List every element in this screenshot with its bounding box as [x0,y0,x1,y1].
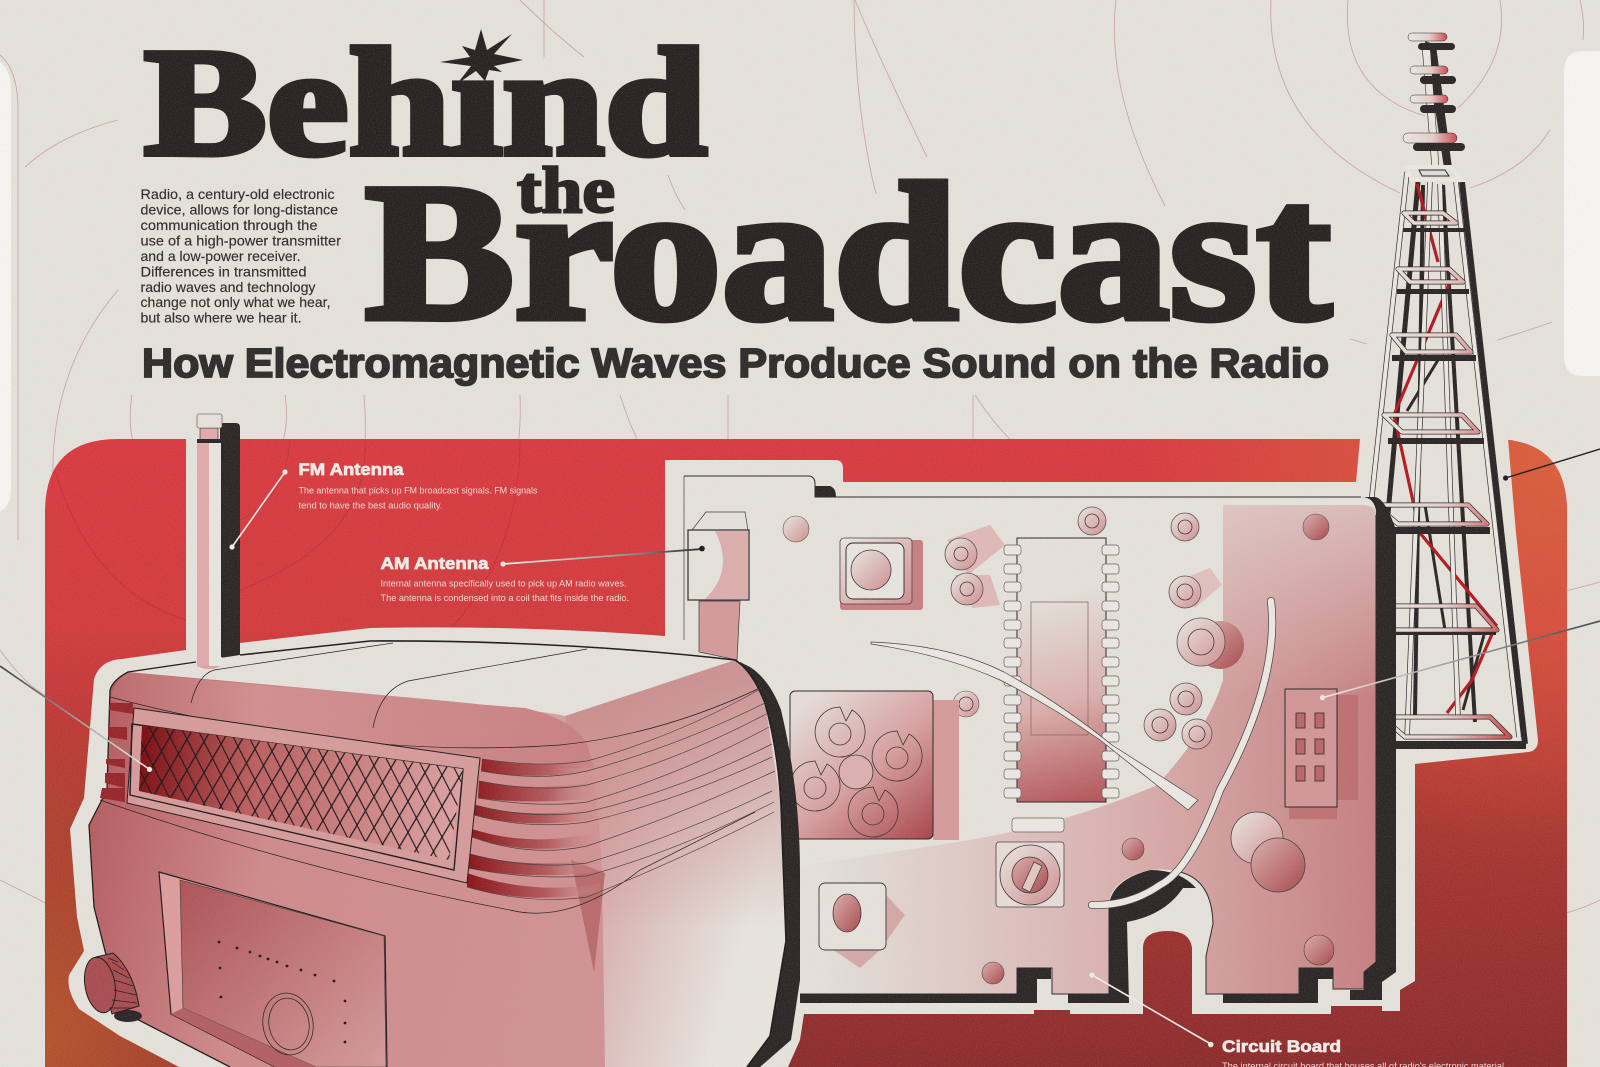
right white side tab [1564,51,1600,376]
tower top frame [1407,167,1462,180]
platforms [1369,213,1526,749]
lattice red braces [1394,184,1496,713]
callout: FM Antenna [229,461,538,550]
rotary potentiometer [996,842,1064,907]
subtitle: How Electromagnetic Waves Produce Sound on the Radio [142,340,1329,386]
circuit board [684,476,1396,1003]
callout: Circuit Board [1089,972,1504,1067]
icon: star over the i [440,29,523,84]
body shadow [700,662,800,1067]
speaker grille [127,708,480,883]
panel speaker dots [218,941,346,1043]
outline and seams [89,641,786,1067]
callout line: tower [1503,449,1600,481]
callout: AM Antenna: AM Antenna [380,555,489,573]
pink lower tone [800,505,1376,994]
red panel [45,439,1567,1067]
intro paragraph: radio waves and technology [140,280,316,295]
push button [819,883,905,968]
intro paragraph: Differences in transmitted [140,264,306,280]
lattice white legs [1345,172,1519,745]
callout line: speaker [0,666,152,772]
capacitors [783,507,1329,749]
radio [80,414,800,1067]
front edge dark wedge [571,860,605,972]
side pink shading [565,660,784,930]
panel wave lines [55,440,1560,901]
callout: AM Antenna: The antenna is condensed into a coil that fits inside the radio. [380,592,629,603]
intro paragraph: Radio, a century-old electronic [140,187,335,202]
intro paragraph: and a low-power receiver. [140,249,300,264]
front panel [159,872,387,1067]
small bar component [1012,818,1064,832]
top face [128,641,735,716]
gear block [790,691,959,840]
right vent stripes [467,757,600,898]
square switch [840,538,923,610]
title [144,18,1331,361]
wires [871,601,1272,905]
mast [1403,33,1465,168]
side vent lines [467,688,775,899]
paper patch over the i dot [456,25,508,79]
panel dial [258,989,318,1059]
pink domes [1231,812,1305,892]
intro paragraph: communication through the [140,218,318,233]
lattice black legs and braces [1368,182,1525,744]
callout line: connector socket [1320,621,1600,700]
intro paragraph: but also where we hear it. [140,310,302,326]
callout: AM Antenna [380,546,705,603]
intro paragraph: use of a high-power transmitter [140,234,341,248]
board surface [684,476,1376,994]
intro paragraph: change not only what we hear, [140,295,330,310]
callout: FM Antenna: The antenna that picks up FM broadcast signals. FM signals [298,484,538,495]
callout: FM Antenna: FM Antenna [298,461,404,479]
FM antenna rod [197,414,222,669]
left vent stripes [100,703,133,802]
AM antenna coil [688,512,749,660]
intro paragraph: device, allows for long-distance [140,202,338,218]
left white side tab [0,62,11,512]
right side face [520,660,786,1067]
board shadow [800,486,1396,1003]
tuning knob [80,953,142,1022]
FM antenna back shadow rod [220,423,240,658]
title word: the: the [517,154,615,227]
top band [110,672,594,768]
callout: AM Antenna: Internal antenna specifically used to pick up AM radio waves. [380,578,626,589]
cutout: radio and board paper outline [68,430,1538,1067]
pale top of pink area [1223,505,1376,700]
front face [89,672,605,1067]
small studs [982,838,1334,984]
transmission tower [1345,33,1526,749]
title word: Behind: Behind [144,18,707,188]
callout: FM Antenna: tend to have the best audio quality. [298,499,442,510]
callout: Circuit Board: Circuit Board [1222,1038,1341,1056]
IC chip [1004,538,1119,802]
connector socket [1285,689,1358,819]
title word: Broadcast: Broadcast [365,144,1331,361]
